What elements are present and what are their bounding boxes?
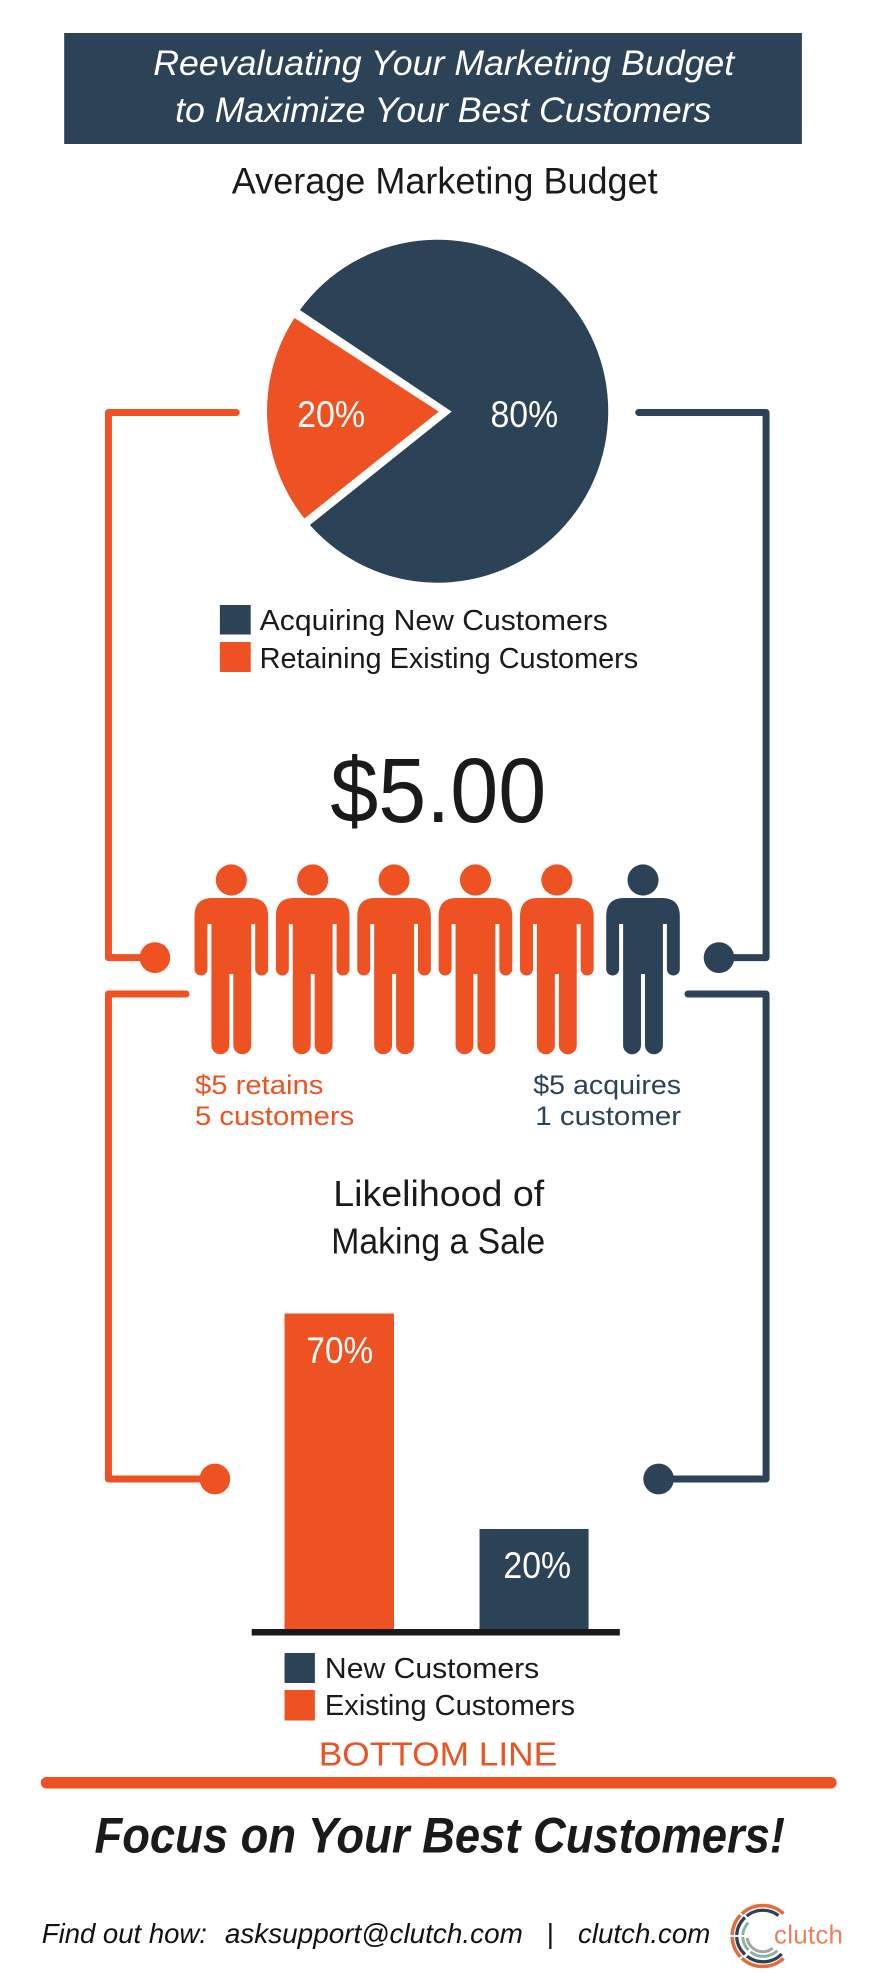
- bar chart: [252, 1314, 620, 1636]
- footer contact line: clutch.com: [578, 1918, 710, 1949]
- pie chart: [267, 240, 608, 583]
- footer contact line: asksupport@clutch.com: [225, 1918, 523, 1949]
- pie legend: Retaining Existing Customers: [260, 643, 638, 675]
- navy label: acquires: 1 customer: [535, 1101, 681, 1131]
- title banner: to Maximize Your Best Customers: [175, 91, 711, 130]
- bar chart: 20%: [503, 1545, 571, 1586]
- footer contact line: |: [547, 1918, 554, 1949]
- heading: likelihood of making a sale: Likelihood of: [333, 1174, 545, 1214]
- dollar amount: $5.00: [330, 740, 546, 842]
- navy label: acquires: $5 acquires: [533, 1070, 681, 1100]
- orange rule: [41, 1777, 837, 1788]
- closing message: Focus on Your Best Customers!: [95, 1808, 785, 1864]
- bar legend: Existing Customers: [325, 1690, 575, 1722]
- title banner: Reevaluating Your Marketing Budget: [153, 44, 736, 83]
- people icons: [195, 864, 680, 1054]
- footer contact line: Find out how:: [42, 1918, 207, 1949]
- pie legend: [220, 605, 638, 675]
- orange label: retains: $5 retains: [195, 1070, 323, 1100]
- heading: likelihood of making a sale: [331, 1174, 545, 1261]
- bar legend: [285, 1653, 575, 1722]
- clutch logo: [732, 1906, 843, 1966]
- bottom line label: BOTTOM LINE: [319, 1736, 557, 1774]
- navy label: acquires: [533, 1070, 681, 1131]
- orange label: retains: 5 customers: [195, 1101, 354, 1131]
- bar chart: 70%: [306, 1330, 373, 1371]
- pie chart: 80%: [490, 394, 558, 435]
- bar legend: New Customers: [325, 1653, 539, 1685]
- clutch logo: clutch: [774, 1919, 843, 1949]
- heading: average marketing budget: Average Marketing Budget: [232, 160, 658, 202]
- navy connector: pie to people: [639, 412, 766, 973]
- title banner: [64, 33, 802, 144]
- heading: likelihood of making a sale: Making a Sale: [331, 1221, 545, 1261]
- orange label: retains: [195, 1070, 354, 1131]
- pie legend: Acquiring New Customers: [260, 605, 608, 637]
- pie chart: 20%: [297, 394, 365, 435]
- footer contact line: [42, 1918, 710, 1949]
- orange connector: people to bars: [108, 994, 230, 1494]
- navy connector: people to bars: [643, 994, 766, 1494]
- orange connector: pie to people: [108, 412, 236, 973]
